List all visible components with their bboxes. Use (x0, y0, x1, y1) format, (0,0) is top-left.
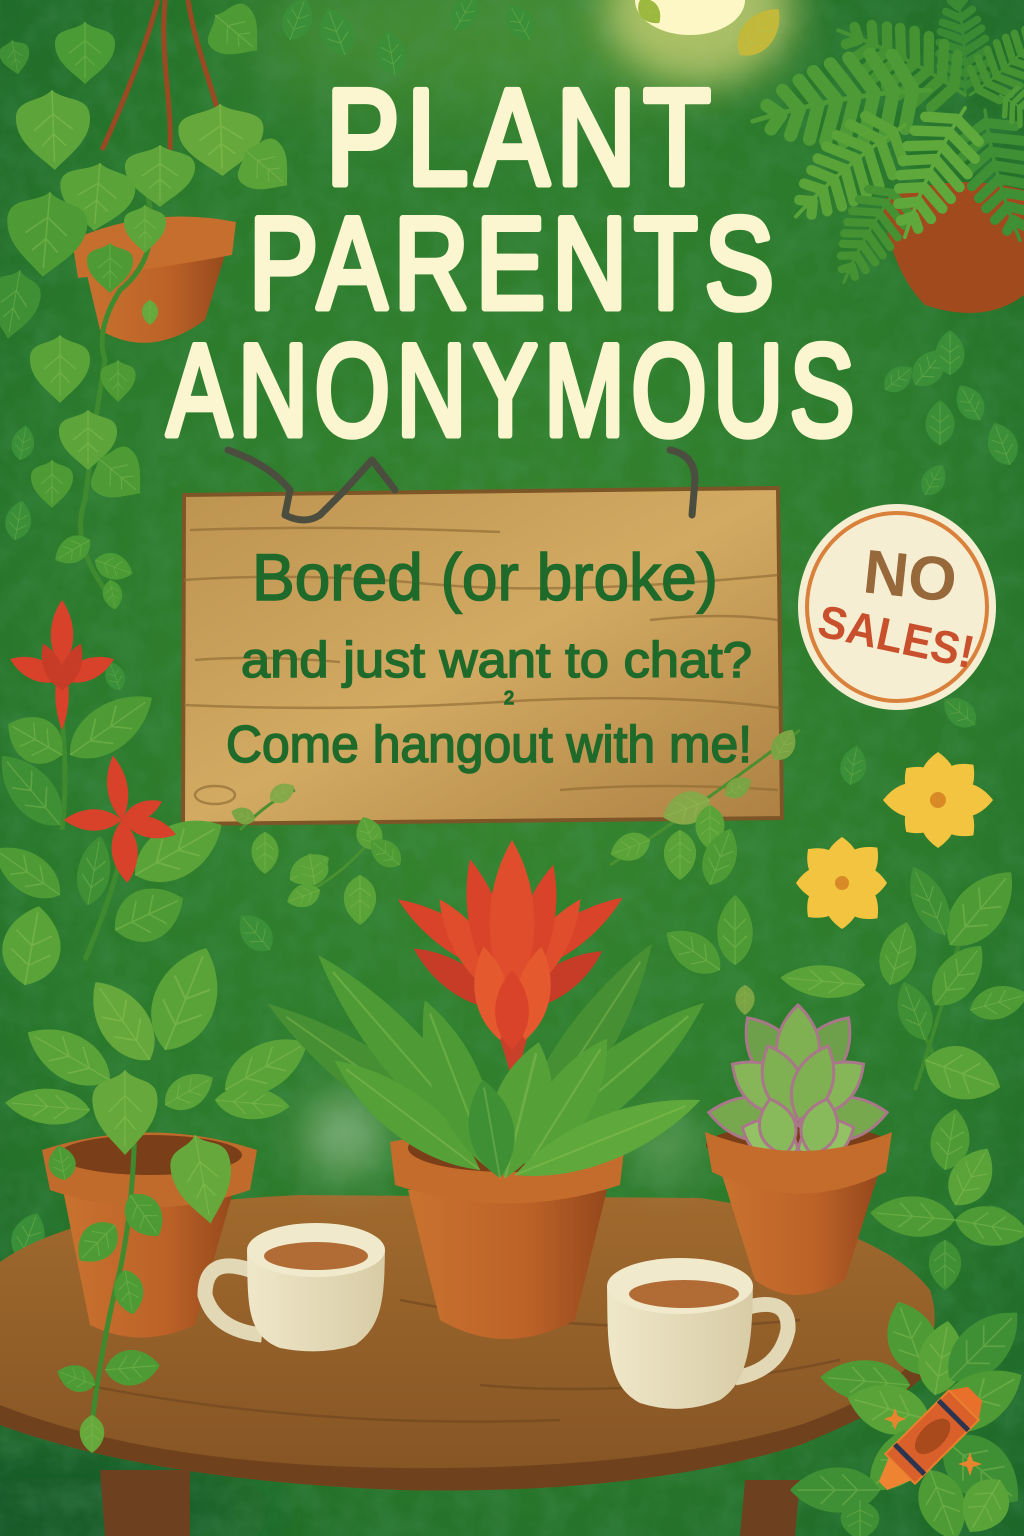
hanging pot (72, 216, 236, 343)
cup body (247, 1250, 385, 1351)
cup body (607, 1285, 753, 1409)
bottom right foliage (790, 1293, 1024, 1536)
sign text: Bored (or broke) (252, 540, 718, 614)
right tea cup (607, 1258, 788, 1409)
center pot (390, 1124, 625, 1339)
sign text (226, 540, 752, 774)
yellow flower left (796, 836, 889, 930)
no sales badge: SALES! (814, 594, 979, 678)
sign text: and just want to chat? (241, 632, 752, 688)
sign hooks (228, 450, 695, 520)
sign text: Come hangout with me! (226, 716, 752, 774)
no sales badge (798, 504, 996, 710)
fern pot (882, 182, 1024, 313)
sign board (183, 488, 782, 824)
left pot vine (90, 1100, 135, 1440)
left potted plant (4, 937, 319, 1453)
fern top right (745, 0, 1024, 313)
title (167, 61, 861, 463)
wooden sign (183, 450, 802, 880)
hanging plant top left (0, 0, 305, 611)
right pot (706, 1125, 890, 1295)
red flower lower (64, 754, 179, 884)
red bloom (390, 840, 631, 1085)
fern fronds (745, 0, 1024, 294)
hanging cords (102, 0, 218, 150)
left pot (42, 1132, 257, 1338)
centre potted bromeliad (253, 840, 722, 1339)
right potted succulent (705, 1005, 892, 1295)
no sales badge: NO (860, 537, 960, 616)
left pot leaves (4, 937, 319, 1453)
heart leaves (0, 0, 305, 611)
wood grain (184, 528, 780, 804)
title: PLANT (326, 61, 718, 213)
green leaves (0, 679, 235, 990)
crayon logo (868, 1379, 990, 1501)
sign text: 2 (504, 688, 514, 708)
right side foliage (779, 857, 1024, 1290)
left tea cup (205, 1223, 385, 1351)
hanging vine (80, 170, 151, 590)
tea (264, 1242, 368, 1270)
small leaves under sign (283, 813, 755, 1015)
red flower upper (6, 600, 118, 730)
title: PARENTS (249, 190, 781, 336)
handle (735, 1304, 788, 1378)
left red flowers plant (0, 600, 235, 990)
yellow flowers (796, 752, 993, 930)
handle (205, 1266, 262, 1335)
sunlight glow (605, 0, 795, 85)
sign vines (229, 724, 802, 880)
stems (62, 720, 120, 960)
table legs (100, 1470, 800, 1536)
long leaves behind (253, 930, 722, 1191)
tea (629, 1280, 739, 1308)
table (0, 1195, 935, 1536)
yellow flower right (883, 752, 993, 848)
long leaves front (321, 991, 709, 1196)
succulent rosette (706, 1005, 890, 1168)
right pot rim (705, 1132, 892, 1194)
steam (303, 1093, 697, 1180)
table top (0, 1195, 935, 1490)
